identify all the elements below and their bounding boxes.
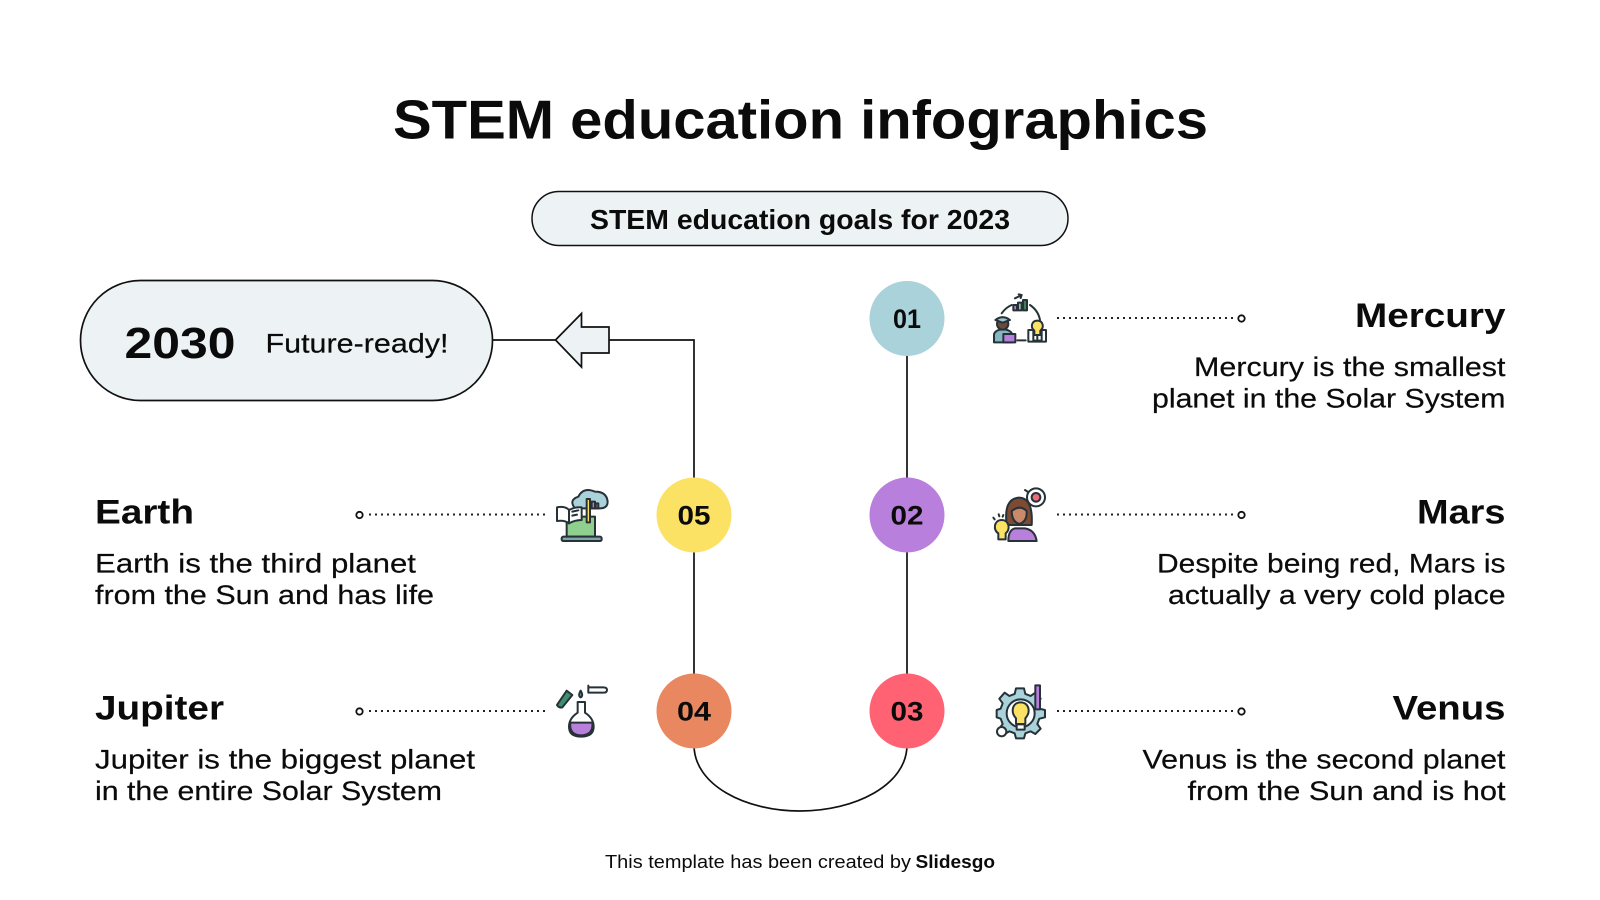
circle 04: 04 (677, 696, 711, 726)
circle 02 (870, 478, 944, 552)
subtitle pill: STEM education goals for 2023 (590, 204, 1010, 235)
text block: Jupiter (95, 690, 476, 806)
text block: Earth (95, 494, 434, 610)
panel: 2030 future-ready (80, 280, 492, 400)
text block: Mercury: planet in the Solar System (1152, 384, 1506, 414)
text block: Mercury: Mercury (1355, 297, 1506, 335)
circle 01 (870, 281, 944, 356)
text block: Jupiter: in the entire Solar System (95, 776, 442, 806)
text block: Venus: Venus (1392, 690, 1506, 728)
text block: Earth: Earth (95, 494, 194, 532)
subtitle pill (532, 192, 1068, 246)
leader: Earth (356, 512, 546, 518)
text block: Venus (1142, 690, 1506, 806)
leader: Venus (1057, 708, 1245, 715)
leader: Jupiter (356, 708, 546, 715)
text block: Mercury (1152, 297, 1506, 414)
icon: cloud laptop book (557, 490, 608, 541)
icon: gear with bulb (997, 685, 1045, 738)
icon: mentor cycle (994, 294, 1046, 342)
circle 01: 01 (893, 304, 921, 334)
panel: 2030 future-ready: Future-ready! (266, 328, 448, 358)
text block: Jupiter: Jupiter is the biggest planet (95, 744, 476, 774)
text block: Venus: from the Sun and is hot (1188, 776, 1506, 806)
icon: woman with target (993, 488, 1045, 541)
text block: Earth: Earth is the third planet (95, 548, 417, 578)
circle 04 (656, 674, 732, 748)
circle 03 (870, 674, 944, 748)
text block: Mars (1157, 494, 1506, 610)
leader: Mercury (1057, 315, 1245, 322)
leader: Mars (1057, 512, 1245, 518)
text block: Jupiter: Jupiter (95, 690, 224, 728)
title: STEM education infographics (393, 88, 1208, 150)
icon: flask and dropper (557, 686, 607, 737)
circle 02: 02 (890, 500, 924, 530)
circle 05: 05 (678, 500, 710, 530)
text block: Mars: Despite being red, Mars is (1157, 548, 1506, 578)
text block: Mars: Mars (1417, 494, 1506, 532)
footer credit: This template has been created by (605, 852, 911, 872)
connector lines (492, 318, 907, 811)
footer credit: Slidesgo (916, 852, 995, 872)
text block: Earth: from the Sun and has life (95, 580, 434, 610)
arrow (556, 314, 609, 367)
text block: Mars: actually a very cold place (1168, 580, 1506, 610)
text block: Venus: Venus is the second planet (1142, 744, 1506, 774)
circle 05 (656, 478, 732, 552)
panel: 2030 future-ready: 2030 (124, 319, 236, 368)
text block: Mercury: Mercury is the smallest (1194, 352, 1506, 382)
circle 03: 03 (890, 696, 924, 726)
